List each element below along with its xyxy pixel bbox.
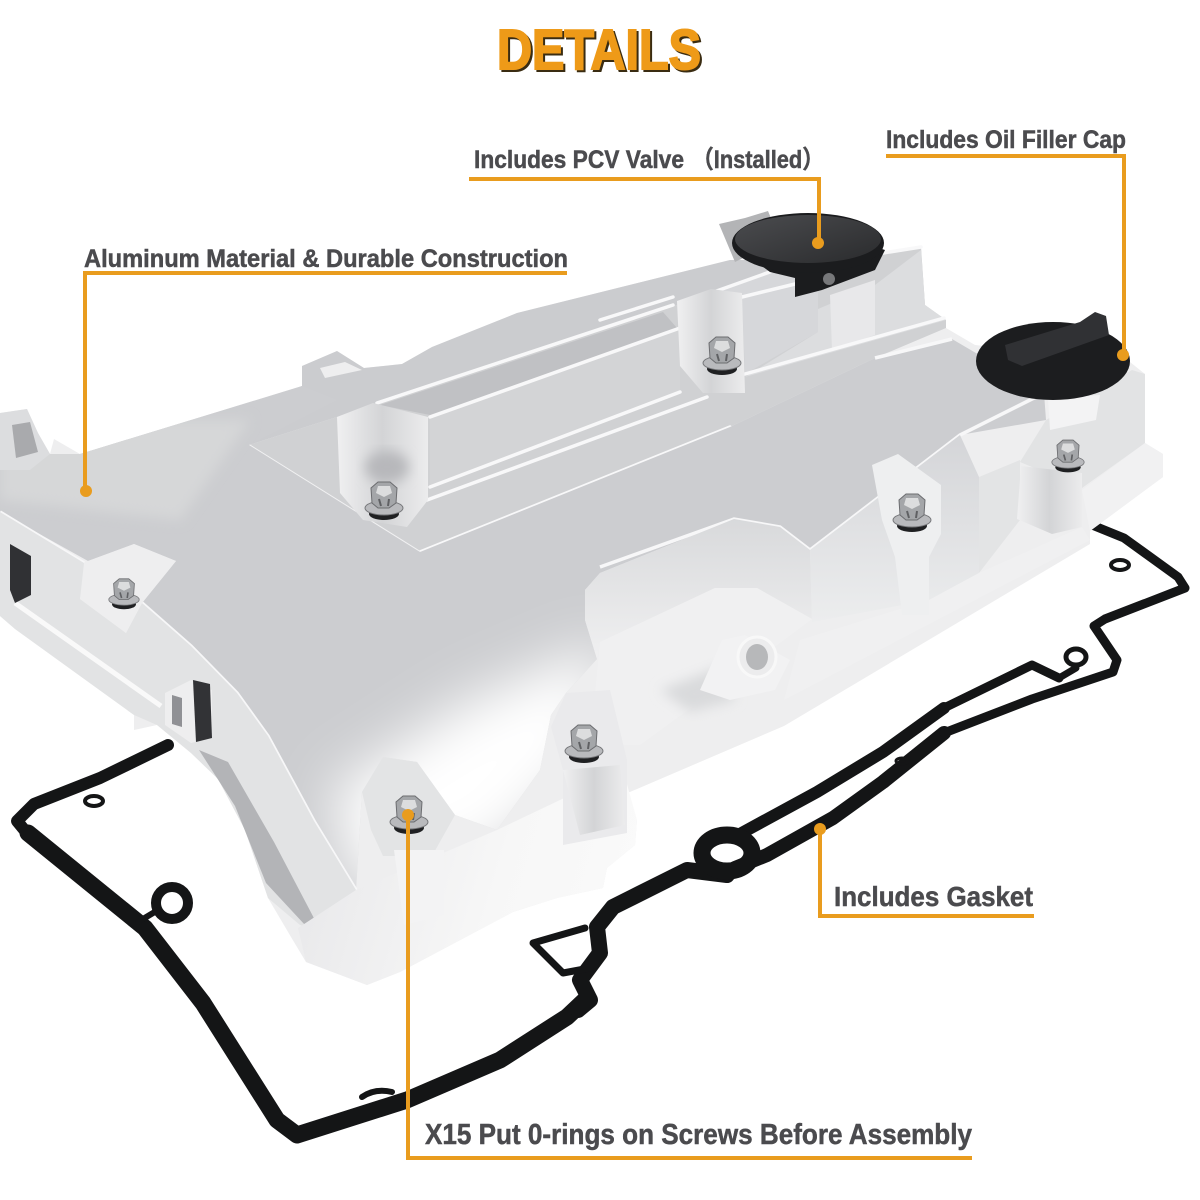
plane edge highlights [0, 339, 1036, 890]
rail front face [430, 330, 680, 487]
rail top face [380, 312, 677, 415]
callout: PCV valve [469, 146, 824, 249]
rail right section [711, 263, 818, 374]
left side strip [0, 512, 356, 935]
boss hole [700, 635, 790, 700]
callout: oil filler cap: Includes Oil Filler Cap [886, 126, 1126, 154]
rail base [249, 247, 946, 552]
valve cover body [0, 247, 1163, 985]
callout: aluminum material [80, 245, 568, 497]
gasket [17, 525, 1185, 1135]
front channel grey strip [199, 750, 316, 925]
callout: oil filler cap [886, 126, 1129, 361]
front block face [810, 435, 979, 622]
top plane [0, 330, 1060, 900]
silhouette [0, 247, 1163, 985]
callout: gasket [814, 823, 1034, 916]
right end block [1020, 370, 1145, 488]
flange top [1082, 443, 1163, 531]
PCV valve cap [719, 211, 885, 297]
back clip [320, 362, 362, 378]
callout: o-rings [402, 809, 972, 1158]
lower flange [298, 770, 637, 985]
left bolt scoop [80, 544, 176, 633]
clips and slots [10, 544, 31, 603]
recess floor [590, 588, 812, 745]
title: DETAILS [497, 18, 701, 82]
screws [109, 337, 1084, 834]
rail outline groove [249, 445, 420, 552]
callout: o-rings: X15 Put 0-rings on Screws Before Assembly [425, 1119, 972, 1151]
callout: aluminum material: Aluminum Material & Durable Construction [84, 245, 568, 273]
title: DETAILS [499, 20, 703, 84]
bolt bosses [337, 403, 428, 527]
rail highlights [377, 247, 944, 552]
callout: PCV valve: Includes PCV Valve [474, 146, 684, 174]
recess [585, 519, 812, 659]
callout: PCV valve: （Installed） [692, 146, 824, 174]
oil filler cap [976, 312, 1130, 430]
back face of rail [150, 260, 800, 450]
callout: gasket: Includes Gasket [834, 881, 1033, 912]
